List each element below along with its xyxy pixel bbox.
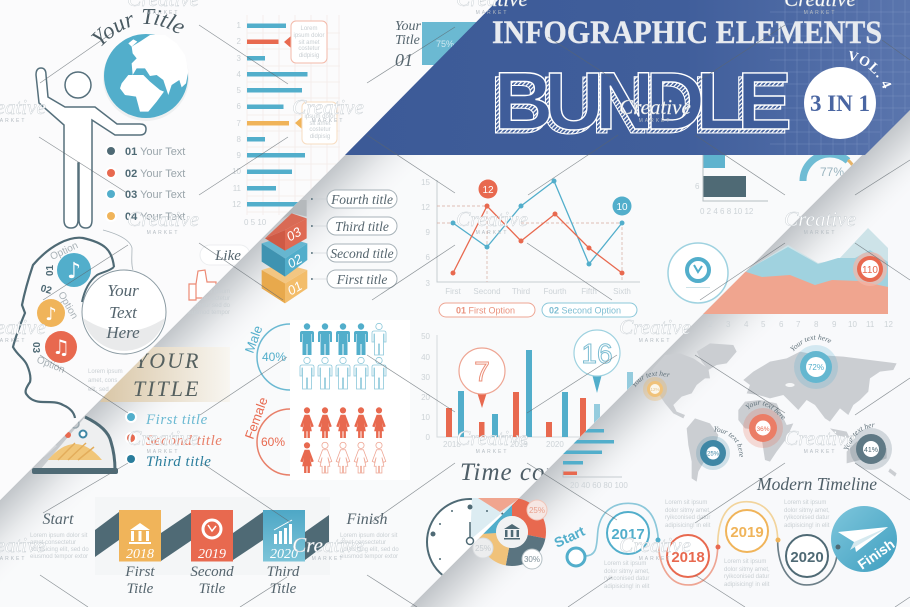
watermarks: Creative xyxy=(127,207,199,231)
panel: middle page xyxy=(0,155,854,593)
music icon orange xyxy=(45,331,77,363)
panel: lower right page xyxy=(410,110,910,607)
bar chart with pins: 0 xyxy=(426,433,431,442)
ribbon panel xyxy=(95,497,330,575)
female ring: 60% xyxy=(261,435,285,449)
female pictograms xyxy=(300,407,386,473)
finish caption: adipisicing elit, sed do xyxy=(340,547,399,553)
your title 01 block xyxy=(395,19,492,70)
your title 01 block: Your xyxy=(395,19,422,34)
map marker 36%: 36% xyxy=(756,426,770,433)
option labels: 01 xyxy=(45,264,56,276)
faded lorem near thumb: tempor sed do xyxy=(192,303,231,309)
area chart axis labels: 9 xyxy=(832,320,837,329)
timeline text blocks: Lorem sit ipsum xyxy=(604,561,646,567)
timeline 2020: 2020 xyxy=(790,549,824,566)
horizontal bar chart: 0 5 10 xyxy=(244,218,267,227)
like badge xyxy=(200,245,250,265)
small bar chart xyxy=(560,429,628,490)
map marker 25% xyxy=(696,436,730,470)
callout 2 xyxy=(295,102,337,144)
map marker 72%: 72% xyxy=(808,363,824,372)
start ring xyxy=(554,527,586,568)
area chart axis labels: 11 xyxy=(866,320,875,329)
finish caption: Lorem ipsum dolor sit xyxy=(340,533,398,539)
box numbers: 02 xyxy=(285,251,305,271)
timeline text blocks: ryikconised datur xyxy=(724,574,769,580)
horizontal bar chart: 8 xyxy=(237,135,242,144)
line chart: 12 xyxy=(482,185,494,196)
callout 1: sit amet xyxy=(298,40,320,46)
your title band: YOUR xyxy=(135,348,200,373)
map marker 41% xyxy=(850,428,892,470)
finish caption: amet consectetur xyxy=(340,540,386,546)
card 2018: 2018 xyxy=(126,547,154,562)
bundle shadow hatch: BUNDLE xyxy=(490,60,788,151)
watermarks: Creative xyxy=(456,426,528,450)
area chart axis labels: 12 xyxy=(884,320,893,329)
finish badge xyxy=(831,506,897,572)
faded lorem near thumb: Lorem ipsum xyxy=(195,289,230,295)
music icon yellow: ♪ xyxy=(45,304,57,325)
thin bubble lead xyxy=(103,230,133,270)
music icon yellow xyxy=(37,299,65,327)
horizontal bar chart: 10 xyxy=(232,167,242,176)
line chart xyxy=(421,178,640,296)
horizontal bar chart: 4 xyxy=(237,70,242,79)
band lorem text: elit, sed xyxy=(88,387,109,393)
donut chart xyxy=(473,500,547,569)
map marker captions xyxy=(632,334,874,457)
watermarks: MARKET xyxy=(476,449,508,455)
box numbers: 01 xyxy=(285,278,305,298)
donut chart: 30% xyxy=(524,555,540,564)
legend: your text: 04 Your Text xyxy=(125,211,185,223)
area chart: 110 xyxy=(862,265,878,276)
timeline text blocks: dolor sitmy amet, xyxy=(665,508,711,514)
line chart: Fifth xyxy=(581,287,597,296)
watermarks: MARKET xyxy=(312,556,344,562)
female ring: Female xyxy=(242,395,271,441)
timeline text blocks: dolor sitmy amet, xyxy=(784,508,830,514)
music icon blue xyxy=(57,253,91,287)
area chart axis labels: 8 xyxy=(814,320,819,329)
card captions: Title xyxy=(270,581,297,597)
music icon orange: ♫ xyxy=(52,335,70,359)
timeline 2020 xyxy=(786,535,828,577)
horizontal bar chart: 2 xyxy=(237,37,242,46)
pill labels: Third title xyxy=(335,219,389,234)
stacked 3D boxes xyxy=(262,200,307,303)
watermarks: Creative xyxy=(619,315,691,339)
start caption xyxy=(30,511,89,560)
card captions xyxy=(124,564,300,597)
callout 2: sit amet xyxy=(309,121,331,127)
panel: top left page xyxy=(12,9,476,457)
male ring xyxy=(242,323,290,390)
box numbers: 03 xyxy=(284,224,304,244)
map marker captions: Your text here xyxy=(745,401,785,420)
text bubble xyxy=(82,270,166,354)
option list: Second title xyxy=(146,433,222,449)
bundle lettering: BUNDLE xyxy=(494,56,792,147)
callout 1: Lorem xyxy=(300,26,318,32)
text bubble: Your xyxy=(107,281,139,300)
timeline 2017: 2017 xyxy=(611,526,645,543)
line chart: 6 xyxy=(426,253,431,262)
timeline dots xyxy=(656,538,840,550)
text bubble: Text xyxy=(109,303,138,322)
card 2018 xyxy=(119,510,161,562)
line chart: Third xyxy=(512,287,530,296)
clock icon badge xyxy=(668,243,728,303)
box numbers xyxy=(288,227,302,295)
watermarks: MARKET xyxy=(147,449,179,455)
badge 3 in 1: 3 IN 1 xyxy=(810,91,870,116)
head inner arc xyxy=(82,267,114,302)
your title 01 block: 75% xyxy=(436,39,454,49)
line chart: Fourth xyxy=(543,287,567,296)
callout 1: ipsum dolor xyxy=(293,33,325,39)
start ring: Start xyxy=(552,523,587,551)
text bubble: Here xyxy=(105,323,140,342)
start caption: adipisicing elit, sed do xyxy=(30,547,89,553)
callout 2: didpisig xyxy=(310,134,330,140)
horizontal bar chart: 9 xyxy=(237,151,242,160)
globe xyxy=(103,34,189,121)
watermarks: Creative xyxy=(456,207,528,231)
bar chart with pins: 2019 xyxy=(510,440,528,449)
bar chart with pins: 40 xyxy=(421,353,431,362)
bar chart with pins: 30 xyxy=(421,373,431,382)
map marker 41%: 41% xyxy=(864,447,878,454)
timeline text blocks: ryikconised datur xyxy=(604,576,649,582)
title: your title: Your Title xyxy=(90,9,184,46)
pictogram panel xyxy=(290,320,410,480)
music icon blue: ♪ xyxy=(67,259,81,284)
bar chart with pins xyxy=(421,332,640,449)
thumb icon xyxy=(189,270,216,300)
faded lorem near thumb xyxy=(187,289,231,316)
dish icon xyxy=(32,417,118,474)
banner grid xyxy=(770,0,910,155)
timeline text blocks xyxy=(604,500,830,590)
area chart axis labels: 10 xyxy=(848,320,857,329)
option list: Third title xyxy=(146,454,211,470)
timeline text blocks: ryikconised datur xyxy=(784,515,829,521)
option labels: Option xyxy=(35,355,66,376)
bar chart with pins: 20 xyxy=(421,393,431,402)
watermarks: Creative xyxy=(292,533,364,557)
map marker captions: Your text here xyxy=(790,334,832,352)
card 2019: 2019 xyxy=(198,547,226,562)
pill labels xyxy=(330,192,394,287)
pill labels: Second title xyxy=(330,246,394,261)
callout 2: ipsum dolor xyxy=(304,114,336,120)
gauge 77%: 77% xyxy=(820,165,844,179)
map marker 36% xyxy=(743,408,783,448)
male pictograms xyxy=(300,323,386,389)
your title 01 block: Title xyxy=(395,33,420,48)
small bars top right: 0 2 4 6 8 10 12 xyxy=(700,207,754,216)
legend: first option: 01 First Option xyxy=(456,306,515,316)
watermarks: Creative xyxy=(292,95,364,119)
timeline text blocks: adipisicing! in elit xyxy=(784,523,830,529)
title pills xyxy=(327,190,397,288)
option labels: Option xyxy=(55,290,80,321)
watermarks: MARKET xyxy=(639,556,671,562)
legend: your text: 01 Your Text xyxy=(125,146,185,158)
option labels: Option xyxy=(49,240,80,263)
line chart: 9 xyxy=(426,228,431,237)
male ring: 40% xyxy=(262,350,286,364)
heading: time concept: Time con xyxy=(460,459,559,486)
horizontal bar chart: 6 xyxy=(237,102,242,111)
option list: First title xyxy=(145,412,208,428)
line chart: 12 xyxy=(421,203,431,212)
gauge 77% xyxy=(803,154,857,181)
timeline text blocks: dolor sitmy amet, xyxy=(724,567,770,573)
like badge: Like xyxy=(214,248,241,264)
timeline text blocks: adipisicing! in elit xyxy=(604,584,650,590)
option list xyxy=(125,411,222,470)
option labels: 03 xyxy=(30,342,41,354)
your title band xyxy=(100,347,230,402)
timeline text blocks: ryikconised datur xyxy=(665,515,710,521)
callout 2: costetur xyxy=(309,127,331,133)
line chart: First xyxy=(445,287,462,296)
female ring xyxy=(242,395,290,475)
band lorem text xyxy=(88,369,123,393)
pin 16 xyxy=(574,330,620,393)
small bars top right: 6 xyxy=(695,182,700,191)
timeline 2017 xyxy=(607,512,649,554)
panel: banner xyxy=(345,0,910,155)
card captions: Second xyxy=(190,564,234,580)
bar chart with pins: 10 xyxy=(421,413,431,422)
banner title: INFOGRAPHIC ELEMENTS xyxy=(492,15,882,51)
map marker 12%: 12% xyxy=(650,387,660,392)
watermarks: Creative xyxy=(784,207,856,231)
male ring: Male xyxy=(242,323,265,355)
band lorem text: Lorem ipsum xyxy=(88,369,123,375)
watermarks: Creative xyxy=(127,426,199,450)
horizontal bar chart: 11 xyxy=(233,184,242,193)
start caption: eiusmod tempor extor xyxy=(30,554,88,560)
pill labels: First title xyxy=(336,272,387,287)
legend: your text: 02 Your Text xyxy=(125,168,185,180)
world map xyxy=(647,343,897,482)
watermarks: MARKET xyxy=(147,230,179,236)
watermarks: MARKET xyxy=(476,230,508,236)
vol 4 label: VOL. 4 xyxy=(849,50,892,88)
option labels: 02 xyxy=(39,283,53,297)
map marker captions: Your text here xyxy=(714,426,743,457)
line chart: 3 xyxy=(426,279,431,288)
finish caption: Finish xyxy=(346,511,387,528)
timeline connector xyxy=(585,502,838,585)
legend: second option: 02 Second Option xyxy=(549,306,621,316)
area chart axis labels: 2 xyxy=(708,320,713,329)
shadow: right page fold xyxy=(410,107,910,607)
watermarks: MARKET xyxy=(476,10,508,16)
pin 16: 16 xyxy=(581,338,613,369)
person pictogram xyxy=(36,68,146,228)
start caption: Start xyxy=(42,511,74,528)
legend: first option xyxy=(439,303,535,317)
legend: your text xyxy=(105,145,185,223)
bar chart with pins: 2018 xyxy=(443,440,461,449)
small bars top right xyxy=(696,155,768,214)
map marker captions: Your text here xyxy=(632,370,670,388)
watermarks: Creative xyxy=(784,426,856,450)
timeline text blocks: Lorem sit ipsum xyxy=(665,500,707,506)
map marker 72% xyxy=(794,345,838,389)
callout 1 xyxy=(284,21,327,63)
faded lorem near thumb: consectetur xyxy=(199,296,230,302)
area chart axis labels xyxy=(726,321,892,327)
pin 7 xyxy=(459,348,505,408)
timeline text blocks: dolor sitmy amet, xyxy=(604,569,650,575)
donut chart: 25% xyxy=(475,544,491,553)
legend: your text: 03 Your Text xyxy=(125,189,185,201)
faded lorem near thumb: eiusmod tempor xyxy=(187,310,230,316)
callout 1: costetur xyxy=(298,46,320,52)
line chart: Second xyxy=(473,287,501,296)
card 2019 xyxy=(191,510,233,562)
start caption: amet consectetur xyxy=(30,540,76,546)
card captions: Title xyxy=(127,581,154,597)
pill labels: Fourth title xyxy=(330,192,393,207)
your title 01 block: 01 xyxy=(395,50,413,70)
line chart: 10 xyxy=(616,202,628,213)
card captions: Third xyxy=(267,564,300,580)
pill connectors xyxy=(311,198,327,280)
area chart axis labels: 5 xyxy=(761,320,766,329)
watermarks: MARKET xyxy=(639,338,671,344)
horizontal bar chart: 12 xyxy=(232,200,242,209)
finish caption: eiusmod tempor extor xyxy=(340,554,398,560)
finish caption xyxy=(340,511,399,560)
pin 7: 7 xyxy=(474,356,490,387)
your title band: TITLE xyxy=(133,376,200,401)
callout 1: didpisig xyxy=(299,53,319,59)
timeline 2018 xyxy=(667,535,709,577)
timeline text blocks: adipisicing! in elit xyxy=(724,582,770,588)
band lorem text: amet, cons xyxy=(88,378,117,384)
card captions: First xyxy=(124,564,155,580)
map marker captions: Your text here xyxy=(844,424,874,450)
heading: modern timeline: Modern Timeline xyxy=(756,474,877,494)
horizontal bar chart: 5 xyxy=(237,86,242,95)
finish badge: Finish xyxy=(855,536,897,572)
area chart axis labels: 6 xyxy=(779,320,784,329)
area chart xyxy=(700,228,888,314)
horizontal bar chart: 3 xyxy=(237,54,242,63)
card captions: Title xyxy=(199,581,226,597)
legend: second option xyxy=(542,303,637,317)
watermarks: MARKET xyxy=(147,10,179,16)
card 2020: 2020 xyxy=(270,547,298,562)
badge 3 in 1 xyxy=(804,67,876,139)
line chart: Sixth xyxy=(613,287,631,296)
horizontal bar chart xyxy=(232,15,340,227)
timeline text blocks: adipisicing! in elit xyxy=(665,523,711,529)
timeline text blocks: Lorem sit ipsum xyxy=(724,559,766,565)
watermarks: MARKET xyxy=(804,10,836,16)
area chart axis labels: 4 xyxy=(744,320,749,329)
timeline text blocks: Lorem sit ipsum xyxy=(784,500,826,506)
area chart axis labels: 7 xyxy=(796,320,801,329)
clock dial xyxy=(427,498,540,585)
map marker 25%: 25% xyxy=(707,452,720,458)
card 2020 xyxy=(263,510,305,562)
donut chart: 25% xyxy=(529,506,545,515)
watermarks: MARKET xyxy=(312,118,344,124)
area chart axis labels: 3 xyxy=(726,320,731,329)
shadow: top-left page fold xyxy=(0,155,402,558)
horizontal bar chart: 7 xyxy=(237,119,242,128)
timeline 2019 xyxy=(726,510,768,552)
watermarks: MARKET xyxy=(804,230,836,236)
watermarks: MARKET xyxy=(639,118,671,124)
watermarks: MARKET xyxy=(804,449,836,455)
timeline 2018: 2018 xyxy=(671,549,705,566)
bar chart with pins: 50 xyxy=(421,332,431,341)
horizontal bar chart: 1 xyxy=(237,21,242,30)
line chart: 15 xyxy=(421,178,431,187)
map marker 12% xyxy=(643,377,667,401)
watermarks: Creative xyxy=(619,533,691,557)
watermarks: Creative xyxy=(619,95,691,119)
small bar chart: 20 40 60 80 100 xyxy=(570,481,628,490)
timeline 2019: 2019 xyxy=(730,524,764,541)
option labels xyxy=(30,240,80,376)
start caption: Lorem ipsum dolor sit xyxy=(30,533,88,539)
bar chart with pins: 2020 xyxy=(546,440,564,449)
head profile xyxy=(13,238,114,418)
